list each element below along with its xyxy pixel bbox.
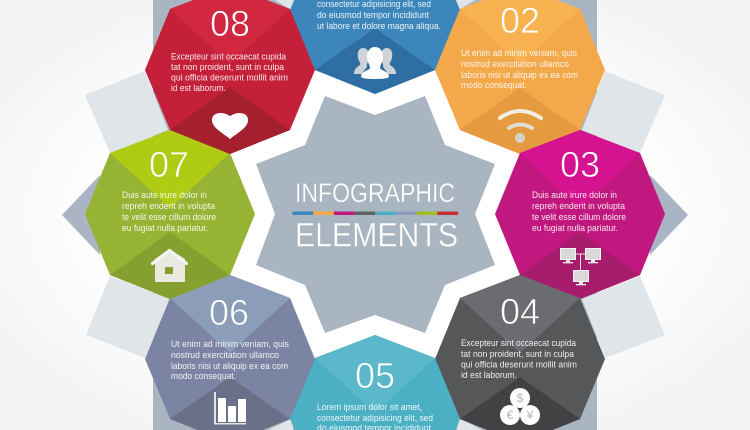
number: 04: 04 [500, 291, 540, 332]
text: 08 body: id est laborum. [171, 83, 226, 93]
number: 06: 06 [209, 292, 249, 333]
text: 06 body [171, 339, 290, 381]
text: 04 body: Excepteur sint occaecat cupida [461, 338, 576, 348]
text: 01 body: do eiusmod tempor incididunt [317, 10, 430, 20]
text: 04 body [461, 338, 577, 380]
text: 04 body: qui officia deserunt mollit anim [461, 360, 577, 370]
text: 02 body: nostrud exercitation ullamco [461, 59, 569, 69]
title: infographic: INFOGRAPHIC [295, 178, 455, 208]
text: 08 body [171, 52, 288, 93]
text: 07 body [122, 190, 216, 233]
text: 05 body: consectetur adipisicing elit, sed [317, 413, 433, 423]
text: 07 body: repreh enderit in volupta [122, 201, 215, 211]
panel: 07 green [85, 130, 255, 299]
text: 07 body: eu fugiat nulla pariatur. [122, 223, 208, 233]
text: 03 body: repreh enderit in volupta [532, 201, 625, 211]
icon: coins: $ [517, 391, 524, 405]
icon: people [354, 47, 396, 79]
panel: 01 blue [290, 0, 460, 94]
title: elements: ELEMENTS [295, 216, 458, 254]
number: 05: 05 [355, 355, 395, 396]
text: 06 body: nostrud exercitation ullamco [171, 350, 279, 360]
text: 05 body: Lorem ipsum dolor sit amet, [317, 402, 422, 412]
text: 08 body: tat non proident, sunt in culpa [171, 62, 284, 72]
text: 04 body: id est laborum. [461, 370, 517, 380]
icon: coins: € [507, 408, 514, 422]
number: 02: 02 [500, 0, 540, 41]
text: 06 body: modo consequat. [171, 371, 236, 381]
icon: heart [212, 113, 248, 139]
text: 04 body: tat non proident, sunt in culpa [461, 349, 574, 359]
text: 08 body: Excepteur sint occaecat cupida [171, 52, 286, 62]
panel: 02 orange [435, 0, 605, 154]
icon: wifi [500, 111, 541, 143]
icon: network [560, 248, 600, 285]
icon: bar chart [214, 392, 246, 424]
icon: coins: ¥ [526, 408, 534, 422]
text: 06 body: Ut enim ad minim veniam, quis [171, 339, 290, 349]
panel: 08 red [145, 0, 315, 154]
text: 02 body: modo consequat. [461, 80, 527, 90]
text: 01 body [317, 0, 441, 31]
panel: 03 magenta [495, 130, 665, 299]
text: 03 body: Duis aute irure dolor in [532, 190, 617, 200]
icon: coins [500, 388, 540, 425]
text: 08 body: qui officia deserunt mollit anim [171, 72, 288, 82]
text: 02 body: Ut enim ad minim veniam, quis [461, 48, 578, 58]
text: 03 body: te velit esse cillum dolore [532, 212, 626, 222]
text: 03 body [532, 190, 626, 233]
text: 02 body [461, 48, 578, 90]
text: 07 body: te velit esse cillum dolore [122, 212, 216, 222]
panel: 04 dark grey [435, 275, 605, 430]
number: 03: 03 [560, 144, 600, 185]
number: 08: 08 [210, 3, 250, 44]
text: 02 body: laboris nisi ut aliquip ex ea com [461, 70, 578, 80]
text: 03 body: eu fugiat nulla pariatur. [532, 223, 618, 233]
text: 07 body: Duis aute irure dolor in [122, 190, 207, 200]
icon: house [152, 249, 186, 282]
text: 06 body: laboris nisi ut aliquip ex ea com [171, 361, 288, 371]
panel: centre star [256, 96, 495, 333]
number: 07: 07 [149, 144, 189, 185]
text: 01 body: ut labore et dolore magna aliqua. [317, 21, 441, 31]
colour bar [292, 212, 458, 215]
text: 05 body [317, 402, 433, 430]
panel: 05 teal [290, 335, 460, 430]
panel: 06 slate [145, 275, 315, 430]
